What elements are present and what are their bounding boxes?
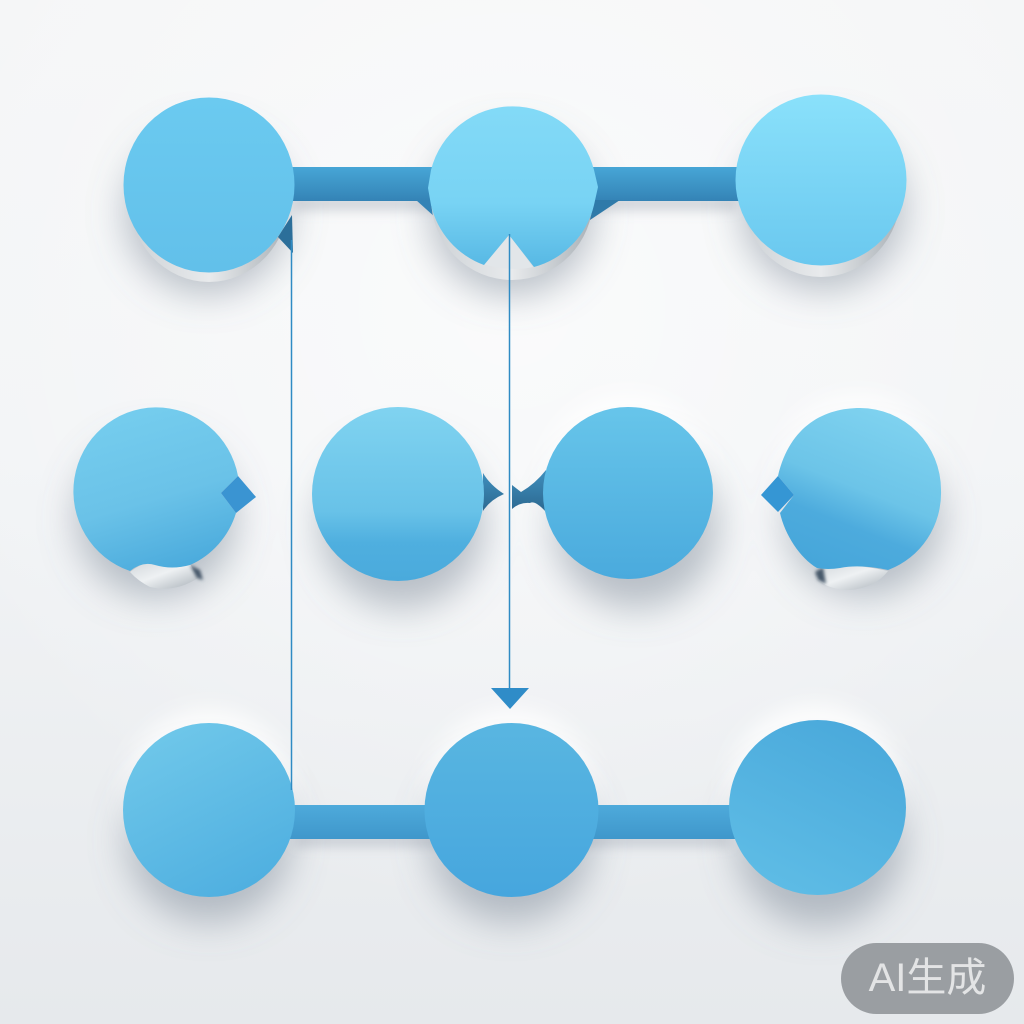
top connector bar xyxy=(290,167,740,220)
circle: row two centre left xyxy=(312,407,484,581)
diamond: row two right xyxy=(761,476,794,512)
connector: row two centre right xyxy=(512,470,546,512)
line arrow: left vertical xyxy=(290,240,292,790)
circle: top centre xyxy=(428,106,598,267)
circle: row two left xyxy=(73,407,238,571)
circle: row two right xyxy=(778,408,941,570)
diamond: row two left xyxy=(221,476,256,513)
left drop connector notch xyxy=(278,215,293,253)
connector: row two centre left xyxy=(483,473,504,511)
circle: row two centre right xyxy=(543,407,713,579)
AI badge xyxy=(841,943,1014,1014)
circle highlights xyxy=(123,394,942,881)
silver rim: top row xyxy=(129,107,901,282)
silver curl: row two right xyxy=(815,565,888,590)
bottom connector bar xyxy=(290,805,735,839)
circle shadows xyxy=(76,126,942,926)
circle: bottom right xyxy=(729,720,906,895)
line arrow: centre vertical xyxy=(491,234,529,709)
silver curl: row two left xyxy=(130,563,203,589)
circle: bottom centre xyxy=(424,723,598,897)
bar shadows xyxy=(294,196,736,846)
circle: top right xyxy=(736,94,906,266)
wedge backing: top centre xyxy=(483,235,533,269)
AI badge: AI生成 xyxy=(869,956,986,1000)
circle: top left xyxy=(124,98,294,272)
circle: bottom left xyxy=(123,723,295,897)
